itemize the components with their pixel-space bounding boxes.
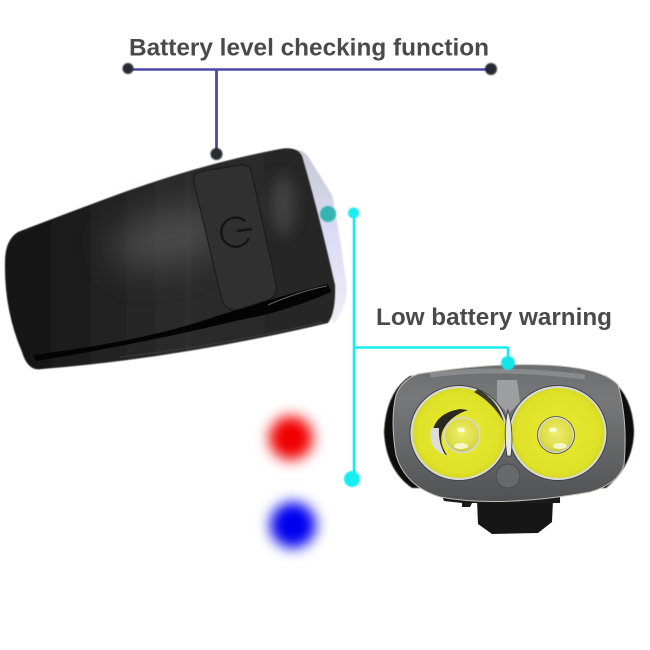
reflector crescent	[432, 409, 468, 455]
indicator glow	[320, 206, 336, 222]
mount bracket	[477, 500, 553, 534]
front-view bike light	[384, 356, 634, 534]
icon: rubber power button	[194, 165, 276, 310]
side-view bike light	[5, 148, 347, 369]
icon: power symbol	[221, 218, 252, 247]
centre seam	[505, 410, 512, 456]
left lens	[412, 388, 506, 478]
callout: battery level connector	[122, 63, 497, 160]
housing	[5, 148, 335, 369]
callout: low battery connector	[344, 208, 508, 487]
left LED dome	[444, 418, 480, 452]
lens edge	[296, 150, 347, 324]
centre bridge details	[497, 380, 520, 414]
right lens	[512, 388, 604, 478]
glossy lower band	[33, 284, 331, 361]
soft highlight	[105, 198, 235, 278]
right LED dome	[538, 418, 574, 452]
rear housing	[384, 376, 634, 488]
heading: battery level checking function: Battery level checking function	[129, 34, 489, 62]
clear front shell	[393, 365, 625, 501]
heading: low battery warning: Low battery warning	[376, 304, 612, 331]
lens surround	[410, 386, 607, 480]
indicator: blue light	[270, 502, 316, 548]
indicator: red light	[269, 416, 313, 460]
warning indicator glow	[501, 356, 515, 370]
